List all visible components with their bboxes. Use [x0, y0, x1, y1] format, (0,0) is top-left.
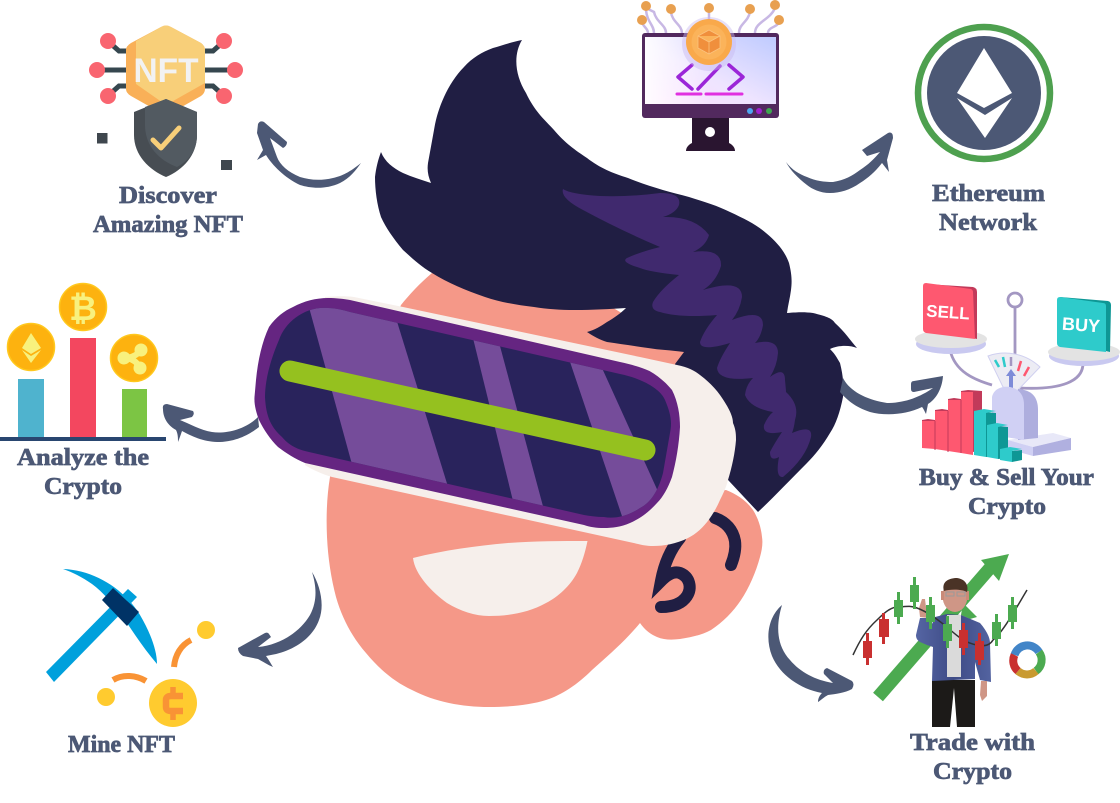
circuit nodes: [89, 33, 243, 104]
icon: pickaxe and coin: [46, 569, 215, 727]
label: analyze the crypto: Analyze the: [17, 445, 149, 471]
pickaxe handle: [46, 589, 137, 682]
diamond: [957, 48, 1012, 138]
orange coin: [686, 19, 732, 65]
icon: NFT shield: [89, 26, 243, 177]
wire ends: [637, 0, 784, 25]
squares: [97, 133, 232, 170]
spark arcs: [113, 640, 191, 681]
jacket: [916, 614, 991, 682]
ethereum coin: [8, 324, 54, 370]
status dots: [747, 108, 772, 114]
arrow to trade: [768, 605, 854, 702]
label: buy and sell: [919, 465, 1094, 520]
monitor body: [642, 33, 779, 118]
pants: [932, 680, 975, 727]
ripple coin: [110, 334, 158, 382]
bitcoin coin: [60, 284, 106, 330]
label: Ethereum network: Network: [939, 210, 1038, 236]
shirt: [947, 615, 961, 677]
icon: blockchain monitor: [637, 0, 784, 151]
trend curve: [853, 590, 1027, 655]
left pan: [915, 330, 987, 354]
arrow to Ethereum: [786, 133, 893, 193]
arrow to mine: [238, 572, 322, 667]
icon: analyze bar chart: [0, 284, 166, 441]
shield light side: [145, 99, 197, 167]
pickaxe head: [63, 569, 157, 664]
lens reflections: [310, 308, 657, 516]
gauge ticks: [995, 357, 1029, 376]
candles: [863, 577, 1017, 665]
hair: [943, 578, 968, 592]
glasses: [946, 592, 965, 596]
arrow to buy and sell: [840, 376, 943, 414]
hexagon light face: [136, 26, 205, 105]
goggles dark lens: [265, 308, 671, 518]
arrow to NFT: [257, 121, 361, 188]
cube: [698, 30, 720, 54]
lens green bar: [290, 371, 645, 450]
check mark: [153, 128, 179, 148]
bars: [18, 338, 147, 437]
label: mine NFT: Mine NFT: [68, 732, 175, 758]
buy block: [1057, 297, 1111, 352]
stand: [686, 118, 735, 151]
blue disc: [927, 36, 1041, 150]
head: [942, 580, 968, 612]
label: buy and sell: Crypto: [968, 494, 1046, 520]
coin: [149, 679, 197, 727]
donut chart: [1013, 645, 1042, 674]
label: discover NFT: Discover: [119, 183, 217, 209]
ears: [941, 591, 969, 600]
teal bars: [974, 409, 1022, 462]
scale base: [1008, 433, 1071, 447]
gauge: [988, 353, 1040, 391]
gauge arrow: [1006, 369, 1016, 388]
goggles purple frame: [254, 298, 680, 528]
scale arms: [950, 293, 1083, 388]
green trend arrow: [878, 554, 1009, 697]
stand hole: [705, 127, 715, 137]
hexagon: [126, 26, 205, 114]
icon: buy and sell scale: [915, 283, 1120, 462]
label: trade with crypto: Crypto: [933, 759, 1012, 785]
label: trade with crypto: [910, 730, 1035, 785]
icon: Ethereum logo: [918, 27, 1050, 159]
code underline: [677, 92, 742, 96]
wires: [642, 8, 779, 33]
hands: [919, 599, 987, 701]
red bars: [922, 390, 982, 455]
scale dome: [1018, 389, 1038, 440]
goggles white shell: [305, 296, 736, 546]
label: Ethereum network: [932, 181, 1045, 236]
sell block: [923, 283, 977, 339]
arrow to analyze: [163, 404, 259, 442]
central head illustration: [254, 40, 857, 707]
circuit lines: [100, 43, 232, 94]
chart baseline: [0, 437, 166, 441]
mouth: [413, 541, 588, 616]
shield: [134, 99, 197, 177]
hair: [375, 40, 857, 512]
icon: trader figure: [853, 554, 1042, 727]
bitcoin coin: ₿: [69, 290, 97, 328]
ear marks: [661, 518, 735, 607]
right pan: [1048, 343, 1120, 366]
label: analyze the crypto: [17, 445, 149, 500]
pickaxe socket: [102, 588, 139, 626]
label: trade with crypto: Trade with: [910, 730, 1035, 756]
face: [327, 273, 700, 707]
code symbol: [678, 65, 743, 89]
label: buy and sell: Buy & Sell Your: [919, 465, 1094, 491]
buy text: BUY: [1061, 314, 1101, 336]
hair highlight: [563, 189, 811, 477]
NFT text: NFT: [134, 52, 199, 90]
screen: [645, 37, 776, 104]
label: discover NFT: Amazing NFT: [93, 212, 243, 238]
label: Ethereum network: Ethereum: [932, 181, 1045, 207]
green ring: [918, 27, 1050, 159]
label: analyze the crypto: Crypto: [44, 474, 122, 500]
label: discover NFT: [93, 183, 243, 238]
VR goggles: [254, 296, 736, 546]
coin symbol: [166, 687, 183, 720]
ear: [630, 490, 762, 640]
sell text: SELL: [926, 302, 970, 323]
small coins: [97, 621, 215, 706]
coin glow: [682, 17, 736, 71]
